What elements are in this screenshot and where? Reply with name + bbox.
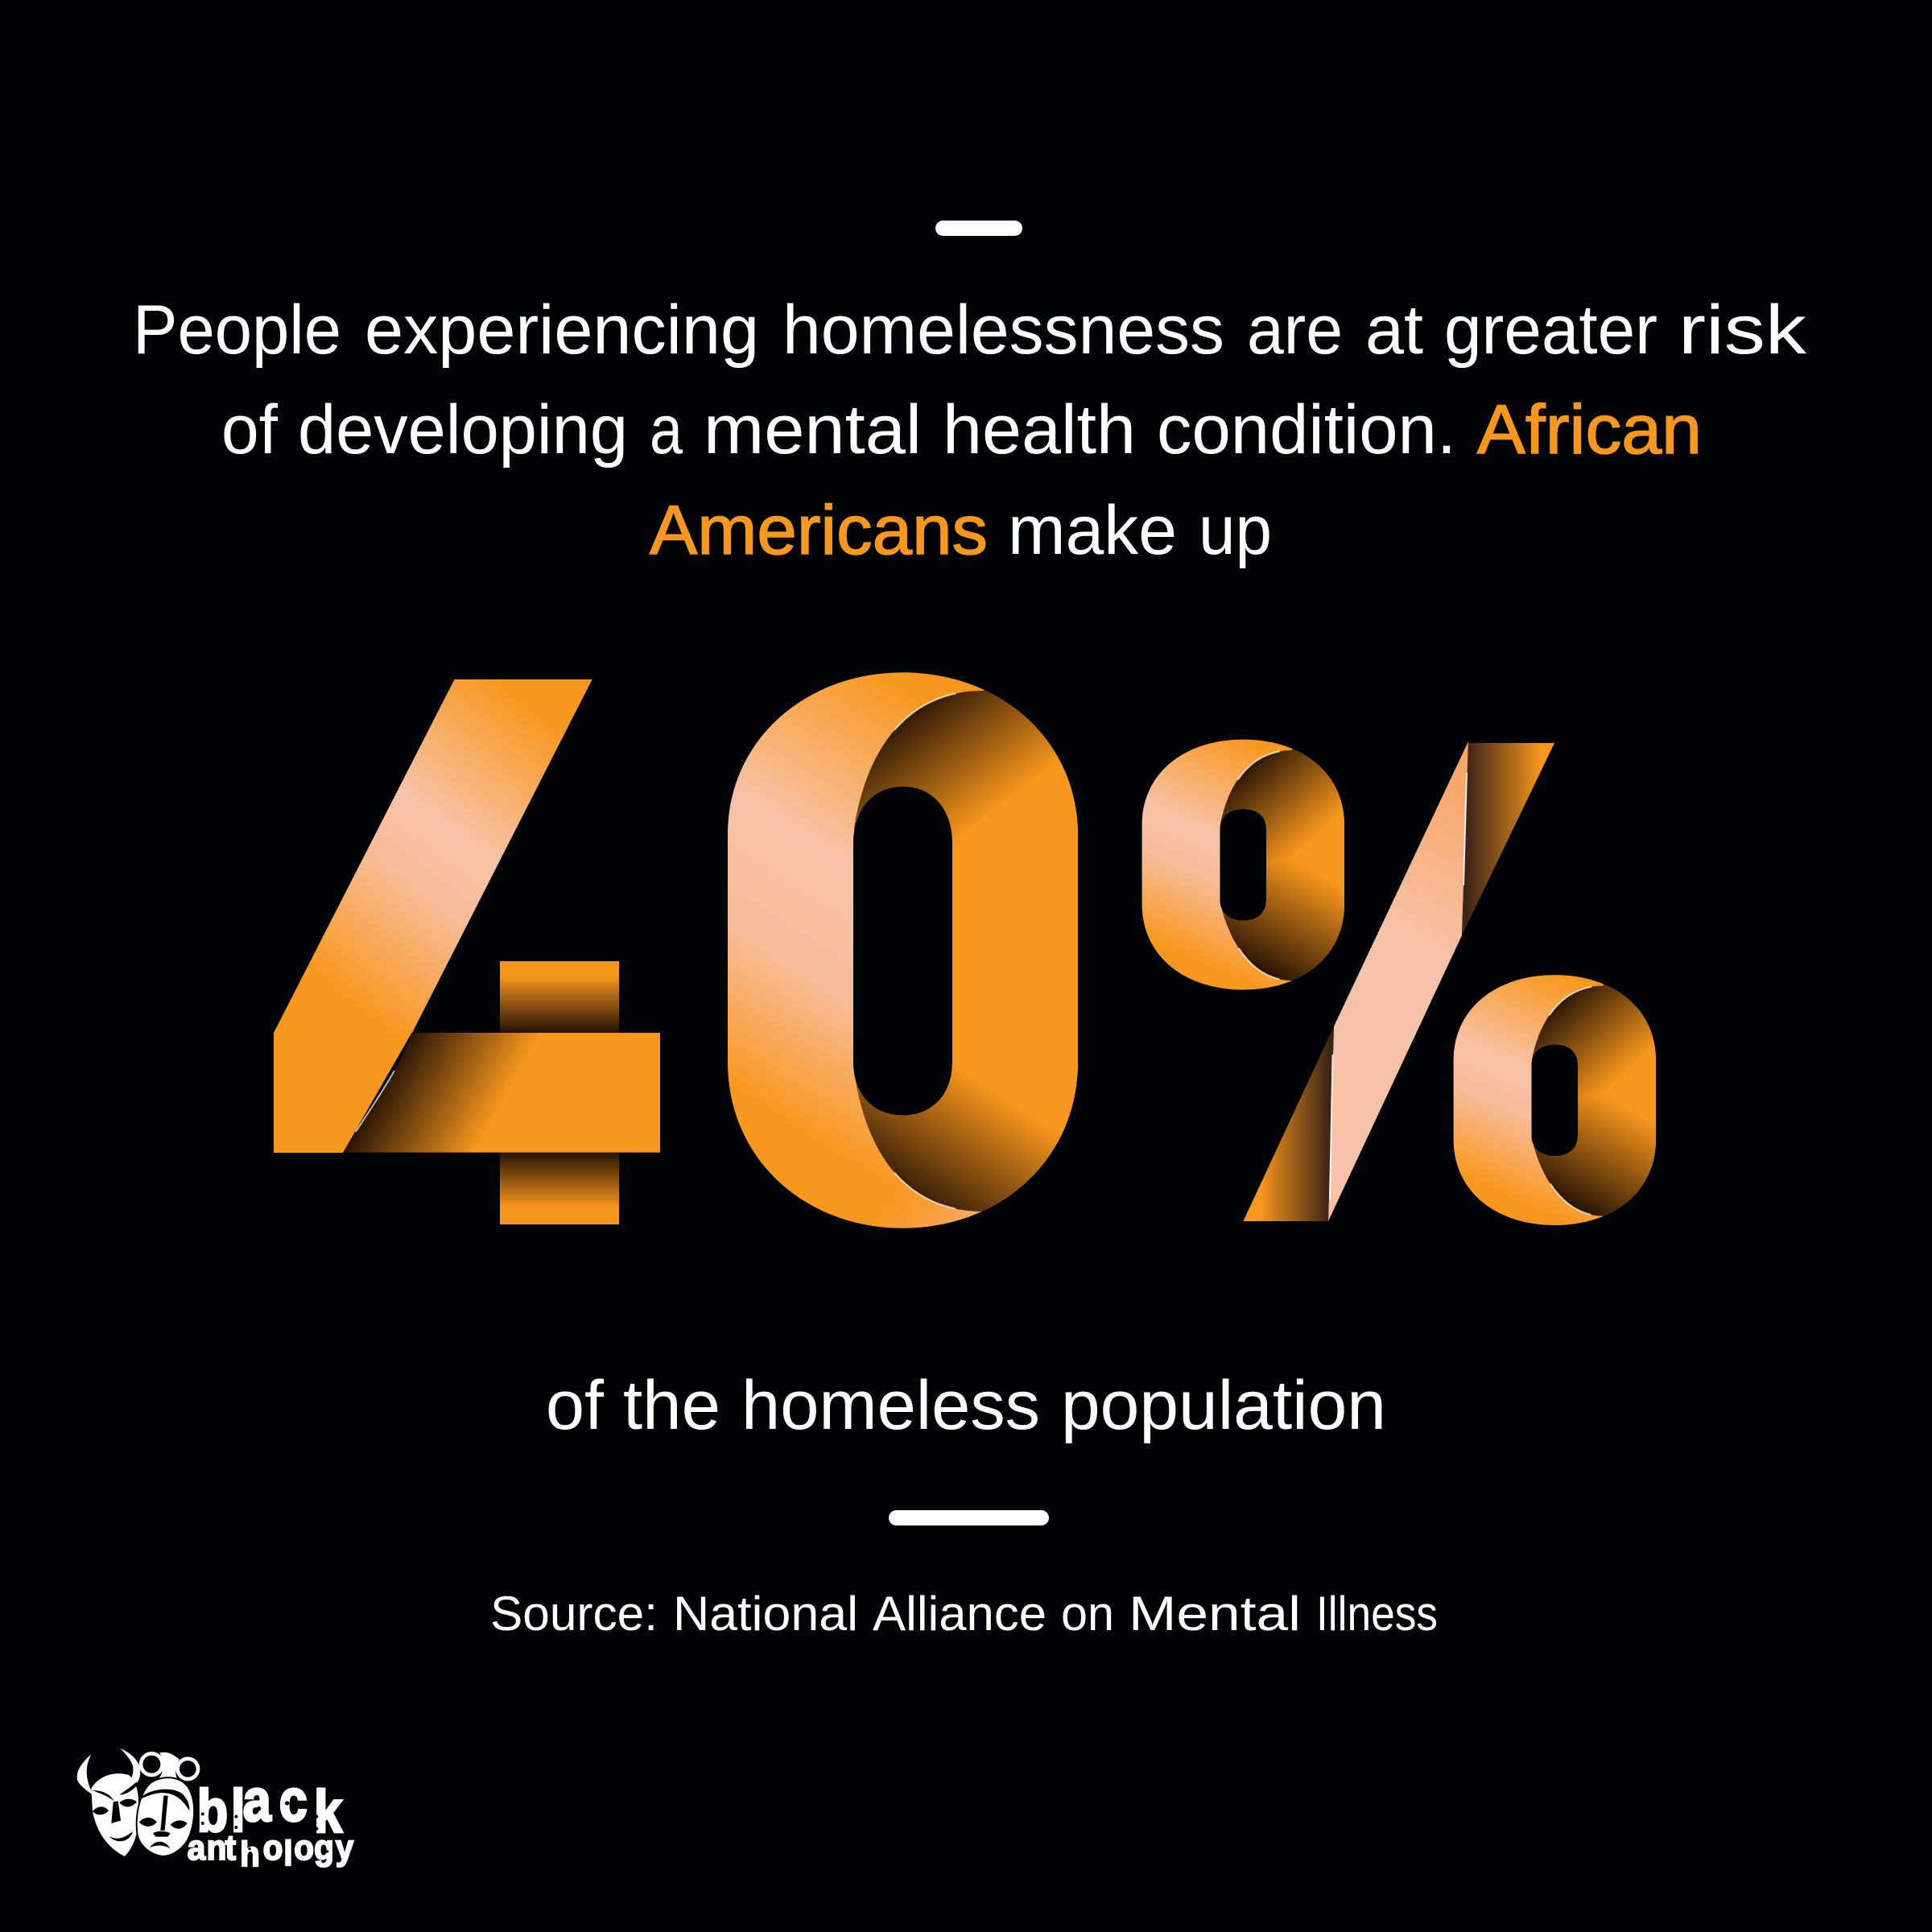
big number 4 bbox=[274, 679, 660, 1224]
intro text: up bbox=[1199, 492, 1272, 569]
intro text: risk bbox=[1678, 291, 1807, 369]
closing statement: population bbox=[1061, 1367, 1386, 1444]
source line bbox=[490, 1587, 1438, 1641]
intro text: make bbox=[1008, 492, 1177, 569]
closing statement: homeless bbox=[741, 1367, 1040, 1444]
source line: National bbox=[673, 1587, 858, 1641]
intro text: greater bbox=[1444, 291, 1657, 369]
intro text bbox=[133, 291, 1807, 569]
top accent bar bbox=[935, 221, 1022, 236]
source line: Mental bbox=[1129, 1587, 1301, 1641]
crossbar bbox=[343, 1033, 660, 1153]
big number 0 bbox=[724, 668, 1083, 1232]
intro text: at bbox=[1365, 291, 1423, 369]
intro text: mental bbox=[704, 391, 922, 469]
lower tab bbox=[500, 1153, 619, 1224]
intro text: experiencing bbox=[365, 291, 759, 369]
source line: Illness bbox=[1316, 1587, 1438, 1641]
intro text: Americans bbox=[650, 492, 988, 569]
closing statement: the bbox=[623, 1367, 720, 1444]
intro text: homelessness bbox=[782, 291, 1224, 369]
fold: bottom bbox=[854, 950, 1083, 1232]
intro text: People bbox=[133, 291, 341, 369]
lower accent bar bbox=[889, 1510, 1049, 1525]
closing statement bbox=[546, 1367, 1386, 1444]
percent sign: upper circle bbox=[1141, 739, 1344, 990]
intro text: a bbox=[650, 391, 683, 469]
fold: top bbox=[854, 668, 1083, 950]
intro text: are bbox=[1247, 291, 1343, 369]
percent sign: slash bbox=[1243, 741, 1554, 1221]
logo wordmark: anthology: anthology bbox=[188, 1827, 354, 1873]
logo: black anthology bbox=[77, 1748, 354, 1873]
intro text: developing bbox=[298, 391, 628, 469]
source line: on bbox=[1061, 1587, 1114, 1641]
source line: Alliance bbox=[873, 1587, 1046, 1641]
percent sign: lower circle bbox=[1454, 975, 1656, 1225]
intro text: health bbox=[943, 391, 1136, 469]
logo wordmark: black: black bbox=[197, 1767, 343, 1845]
closing statement: of bbox=[546, 1367, 605, 1444]
upper tab bbox=[500, 961, 619, 1033]
logo letter speckles bbox=[201, 1801, 329, 1858]
source line: Source: bbox=[490, 1587, 658, 1641]
intro text: condition. bbox=[1157, 391, 1456, 469]
logo masks bbox=[77, 1748, 198, 1856]
intro text: African bbox=[1477, 391, 1702, 469]
intro text: of bbox=[221, 391, 279, 469]
